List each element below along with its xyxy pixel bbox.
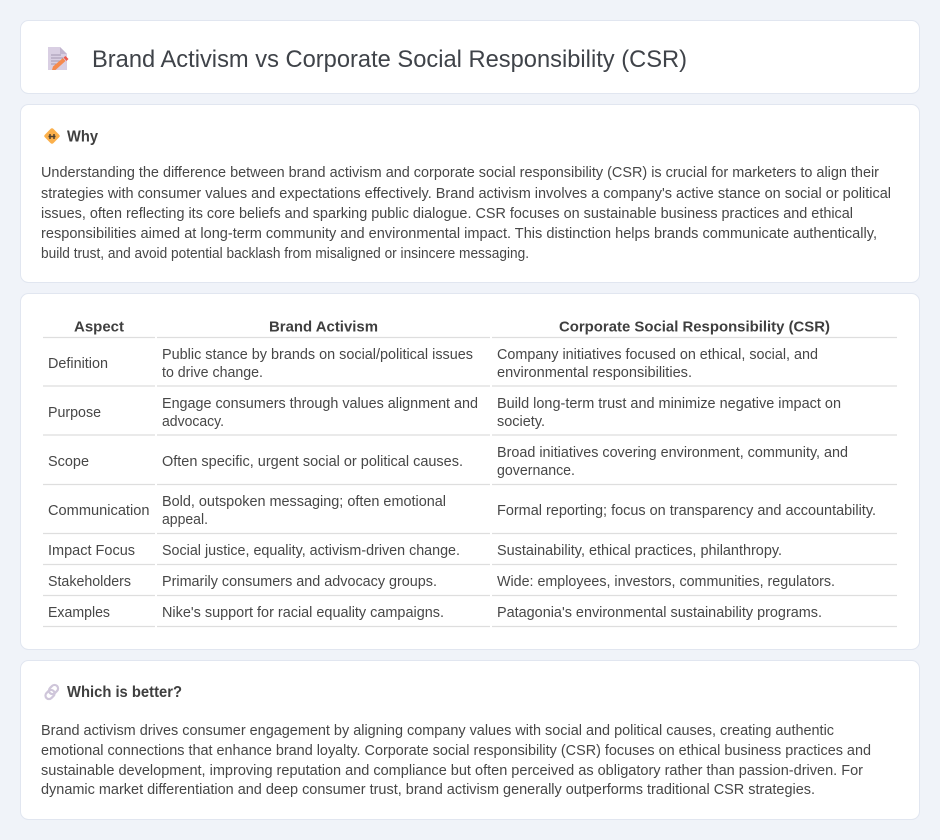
- row: scope: [48, 445, 848, 479]
- row: purpose: advocacy.: [162, 414, 224, 430]
- icon: warning diamond: [44, 128, 60, 144]
- row: stakeholders: Stakeholders: [48, 574, 131, 590]
- text block: which is better paragraph: [41, 723, 871, 798]
- row: communication: Bold, outspoken messaging; often emotional: [162, 494, 446, 510]
- text block: why paragraph: build trust, and avoid potential backlash from misaligned or insincere messaging.: [41, 246, 529, 262]
- row: definition: Public stance by brands on social/political issues: [162, 347, 473, 363]
- row: stakeholders: Wide: employees, investors, communities, regulators.: [497, 574, 835, 590]
- row: purpose: Build long-term trust and minimize negative impact on: [497, 396, 841, 412]
- table header: [74, 318, 830, 336]
- table header: Aspect: [74, 318, 124, 336]
- row: communication: Formal reporting; focus on transparency and accountability.: [497, 503, 876, 519]
- row: definition: environmental responsibilities.: [497, 365, 692, 381]
- row: scope: Often specific, urgent social or political causes.: [162, 454, 463, 470]
- row: communication: [48, 494, 876, 528]
- title: Brand Activism vs Corporate Social Responsibility (CSR): [92, 46, 687, 73]
- text block: which is better paragraph: sustainable development, improving reputation and compliance but often perceived as obligatory rather than passion-driven. For: [41, 763, 863, 779]
- table header: Corporate Social Responsibility (CSR): [559, 318, 830, 336]
- row: stakeholders: [48, 574, 835, 590]
- text block: which is better paragraph: emotional connections that enhance brand loyalty. Corporate social responsibility (CSR) focuses on ethical business practices and: [41, 743, 871, 759]
- row: impact focus: Sustainability, ethical practices, philanthropy.: [497, 543, 782, 559]
- text block: why paragraph: [41, 165, 891, 262]
- row: definition: to drive change.: [162, 365, 263, 381]
- text block: why paragraph: strategies with consumer values and expectations effectively. Brand activism involves a company's active stance on social or political: [41, 186, 891, 202]
- row: stakeholders: Primarily consumers and advocacy groups.: [162, 574, 437, 590]
- row: communication: Communication: [48, 503, 150, 519]
- table header: Brand Activism: [269, 318, 378, 336]
- row: purpose: society.: [497, 414, 545, 430]
- text block: which is better paragraph: dynamic market differentiation and deep consumer trust, brand activism generally outperforms traditional CSR strategies.: [41, 782, 815, 798]
- text block: why paragraph: responsibilities aimed at long-term community and environmental impact. This distinction helps brands communicate authentically,: [41, 226, 877, 242]
- row: examples: Nike's support for racial equality campaigns.: [162, 605, 444, 621]
- row: purpose: [48, 396, 841, 430]
- row: examples: Examples: [48, 605, 110, 621]
- panel: why: [20, 104, 920, 282]
- row: purpose: Engage consumers through values alignment and: [162, 396, 478, 412]
- heading: which is better: Which is better?: [67, 684, 182, 701]
- row: examples: [48, 605, 822, 621]
- row: examples: Patagonia's environmental sustainability programs.: [497, 605, 822, 621]
- text block: why paragraph: Understanding the difference between brand activism and corporate social responsibility (CSR) is crucial for marketers to align their: [41, 165, 879, 181]
- row: impact focus: Impact Focus: [48, 543, 135, 559]
- icon: link: [44, 683, 60, 701]
- row: communication: appeal.: [162, 512, 208, 528]
- row: definition: [48, 347, 818, 381]
- heading: why: Why: [67, 128, 98, 146]
- text block: which is better paragraph: Brand activism drives consumer engagement by aligning company values with social and political causes, creating authentic: [41, 723, 834, 739]
- row: impact focus: [48, 543, 782, 559]
- row: scope: Broad initiatives covering environment, community, and: [497, 445, 848, 461]
- row: scope: Scope: [48, 454, 89, 470]
- row: impact focus: Social justice, equality, activism-driven change.: [162, 543, 460, 559]
- text block: why paragraph: issues, often reflecting its core beliefs and sparking public dialogue. CSR focuses on sustainable business practices and ethical: [41, 206, 853, 222]
- row: definition: Company initiatives focused on ethical, social, and: [497, 347, 818, 363]
- row: purpose: Purpose: [48, 405, 101, 421]
- panel: title header: [20, 20, 920, 94]
- panel: which is better: [20, 660, 920, 820]
- icon: document with pencil: [48, 47, 68, 70]
- row: definition: Definition: [48, 356, 108, 372]
- row: scope: governance.: [497, 463, 575, 479]
- panel: comparison table: [20, 294, 920, 650]
